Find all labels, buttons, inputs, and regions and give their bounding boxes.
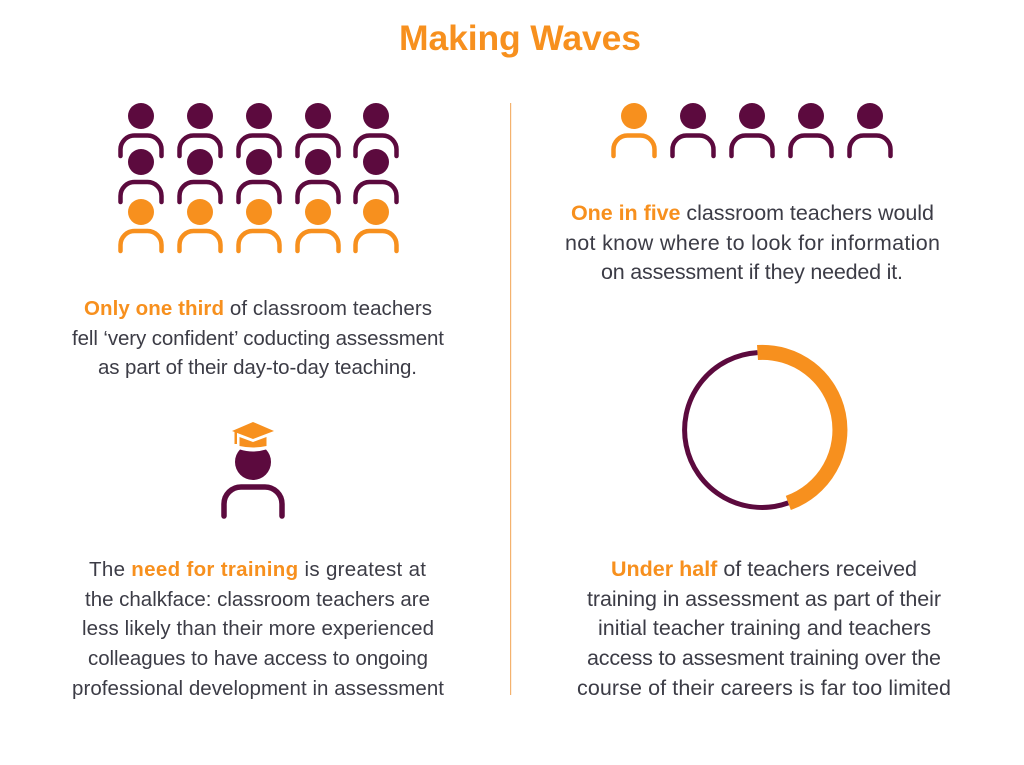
center divider: [510, 103, 511, 695]
text: under half: Under half of teachers received: [611, 557, 917, 581]
text: one in five: One in five classroom teachers would: [571, 201, 934, 225]
text: one in five: [565, 201, 940, 284]
icon group: one in five teachers: [613, 103, 891, 156]
text: need for training: colleagues to have access to ongoing: [88, 647, 428, 670]
text: only one third: fell ‘very confident’ coducting assessment: [72, 327, 444, 350]
text: one in five: not know where to look for information: [565, 231, 940, 255]
text: need for training: [72, 558, 444, 700]
text: need for training: The need for training is greatest at: [89, 558, 426, 581]
text: under half: access to assesment training over the: [587, 646, 941, 670]
text: under half: training in assessment as part of their: [587, 587, 941, 611]
title: Making Waves: [399, 18, 641, 58]
text: under half: [577, 557, 951, 700]
text: under half: course of their careers is far too limited: [577, 676, 951, 700]
ring chart: under half: [685, 352, 840, 507]
text: under half: initial teacher training and teachers: [598, 616, 931, 640]
text: only one third: as part of their day-to-day teaching.: [98, 356, 417, 379]
text: need for training: less likely than their more experienced: [82, 617, 434, 640]
text: only one third: Only one third of classroom teachers: [84, 297, 432, 320]
text: one in five: on assessment if they needed it.: [601, 260, 903, 284]
text: only one third: [72, 297, 444, 379]
text: need for training: professional development in assessment: [72, 677, 444, 700]
text: need for training: the chalkface: classroom teachers are: [85, 588, 430, 611]
icon: graduate with mortarboard: [224, 422, 282, 516]
icon group: one third of teachers: [120, 103, 397, 251]
